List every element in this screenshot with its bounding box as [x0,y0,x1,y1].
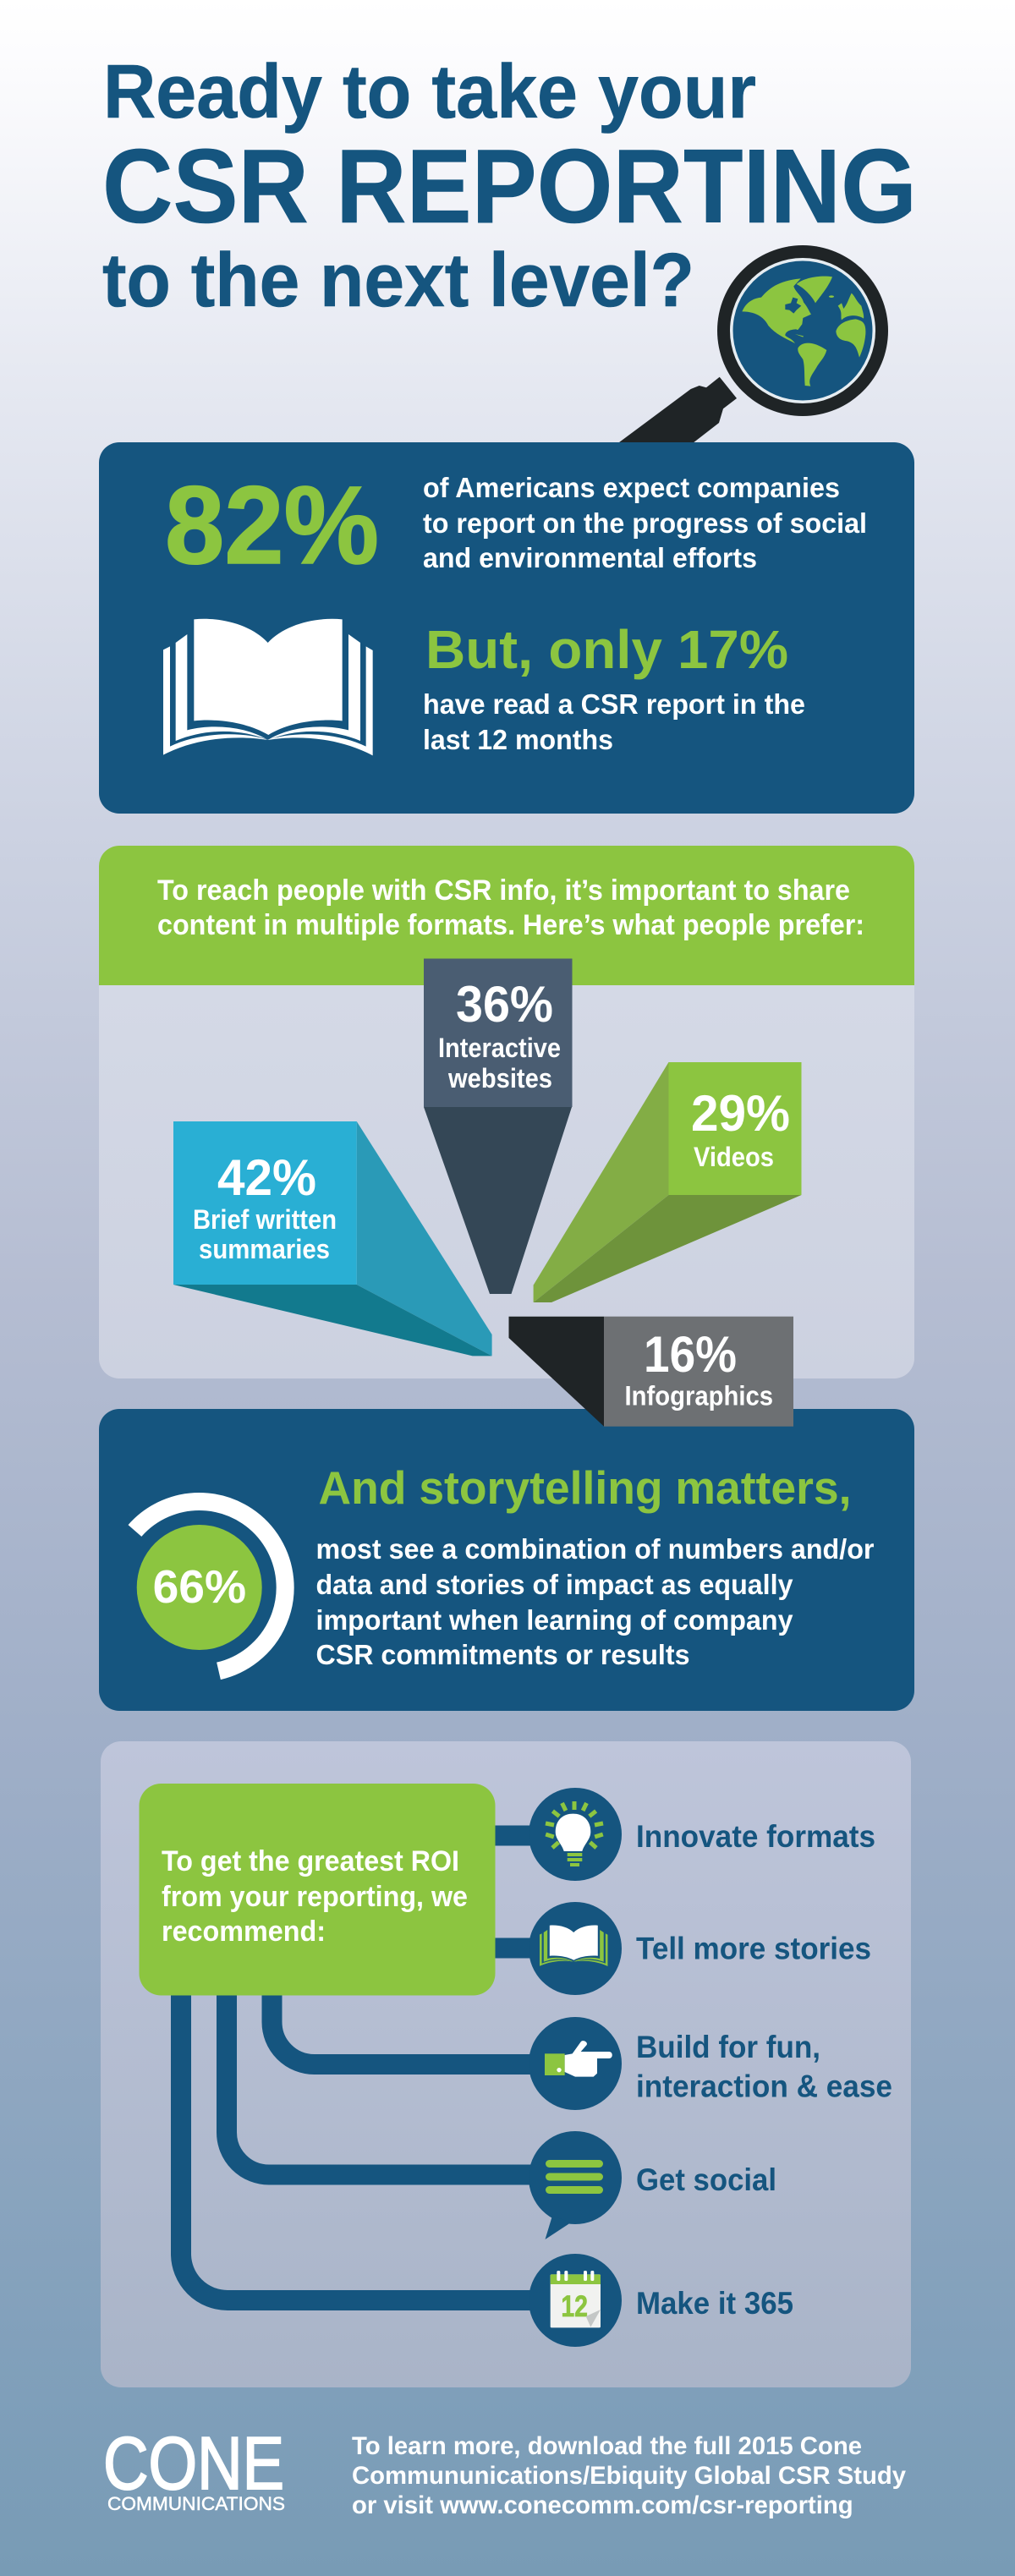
text: footer call to action: To learn more, download the full 2015 Cone [352,2432,862,2460]
panel: 82 percent expectation [99,442,914,814]
text: readership description: have read a CSR report in the [423,688,805,720]
label: build for fun: interaction & ease [636,2069,892,2104]
wedge: 16% infographics: Infographics [624,1380,773,1411]
chart: 66% donut: 66% [153,1560,246,1613]
text: storytelling description: data and stories of impact as equally [316,1569,793,1600]
label: tell more stories: Tell more stories [636,1932,871,1965]
icon: magnifying glass with globe [619,245,888,442]
label: get social: Get social [636,2162,776,2197]
wedge: 36% interactive websites [424,959,572,1294]
title: CSR REPORTING [102,129,917,245]
wedge: 29% videos [534,1062,802,1302]
panel: storytelling matters [99,1409,914,1711]
text: readership description [423,688,805,755]
heading: but only 17%: But, only 17% [425,619,788,680]
icon: calendar [529,2254,622,2347]
wedge: 29% videos: 29% [691,1085,790,1142]
callout: recommendation intro: To get the greatest ROI [162,1845,459,1877]
wedge: 36% interactive websites: 36% [456,976,553,1033]
chart: 66% donut [134,1502,285,1671]
wedge: 42% brief written summaries: summaries [199,1234,330,1264]
text: storytelling description: important when learning of company [316,1604,793,1636]
callout: recommendation intro [139,1784,496,1996]
text: storytelling description: CSR commitments or results [316,1639,690,1670]
wedge: 16% infographics [509,1317,793,1427]
banner: formats intro [99,846,914,985]
text: footer call to action [352,2432,906,2519]
wedge: 36% interactive websites: Interactive [438,1033,561,1063]
label: build for fun: Build for fun, [636,2030,820,2064]
banner: formats intro: To reach people with CSR info, it’s important to share [157,874,850,907]
icon: speech bubble [529,2131,622,2239]
text: expectation description: to report on the progress of social [423,507,867,539]
big stat: 82%: 82% [165,463,379,587]
panel: recommendations [101,1741,911,2387]
wedge: 36% interactive websites: websites [447,1063,552,1093]
title [102,50,917,323]
label: build for fun [636,2030,892,2104]
text: expectation description: of Americans expect companies [423,472,840,503]
label: make it 365: Make it 365 [636,2286,793,2321]
callout: recommendation intro: from your reporting, we [162,1881,468,1913]
wedge: 16% infographics: 16% [644,1326,737,1383]
text: expectation description [423,472,867,573]
text: storytelling description [316,1533,875,1670]
text: footer call to action: or visit www.conecomm.com/csr-reporting [352,2491,853,2519]
logo: Cone Communications: COMMUNICATIONS [107,2493,285,2514]
wedge: 29% videos: Videos [694,1142,774,1172]
wedge: 42% brief written summaries: 42% [217,1149,316,1206]
logo: Cone Communications: CONE [103,2421,284,2505]
title: Ready to take your [103,50,756,134]
banner: formats intro: content in multiple formats. Here’s what people prefer: [157,909,864,941]
icon: pointing hand [529,2017,622,2110]
icon: book [529,1902,622,1995]
connectors [181,1835,541,2300]
icon: open book [163,619,373,755]
title: to the next level? [102,238,694,323]
text: expectation description: and environmental efforts [423,542,757,573]
wedge: 42% brief written summaries [173,1121,492,1356]
icon: lightbulb [529,1788,622,1881]
callout: recommendation intro: recommend: [162,1916,326,1948]
label: innovate formats: Innovate formats [636,1819,875,1854]
heading: and storytelling matters: And storytelling matters, [318,1461,851,1514]
panel: preferred content formats [99,846,914,1378]
text: storytelling description: most see a combination of numbers and/or [316,1533,875,1565]
text: readership description: last 12 months [423,724,613,755]
wedge: 42% brief written summaries: Brief written [193,1204,337,1235]
text: footer call to action: Commununications/Ebiquity Global CSR Study [352,2462,906,2490]
icon: calendar: 12 [561,2290,588,2323]
